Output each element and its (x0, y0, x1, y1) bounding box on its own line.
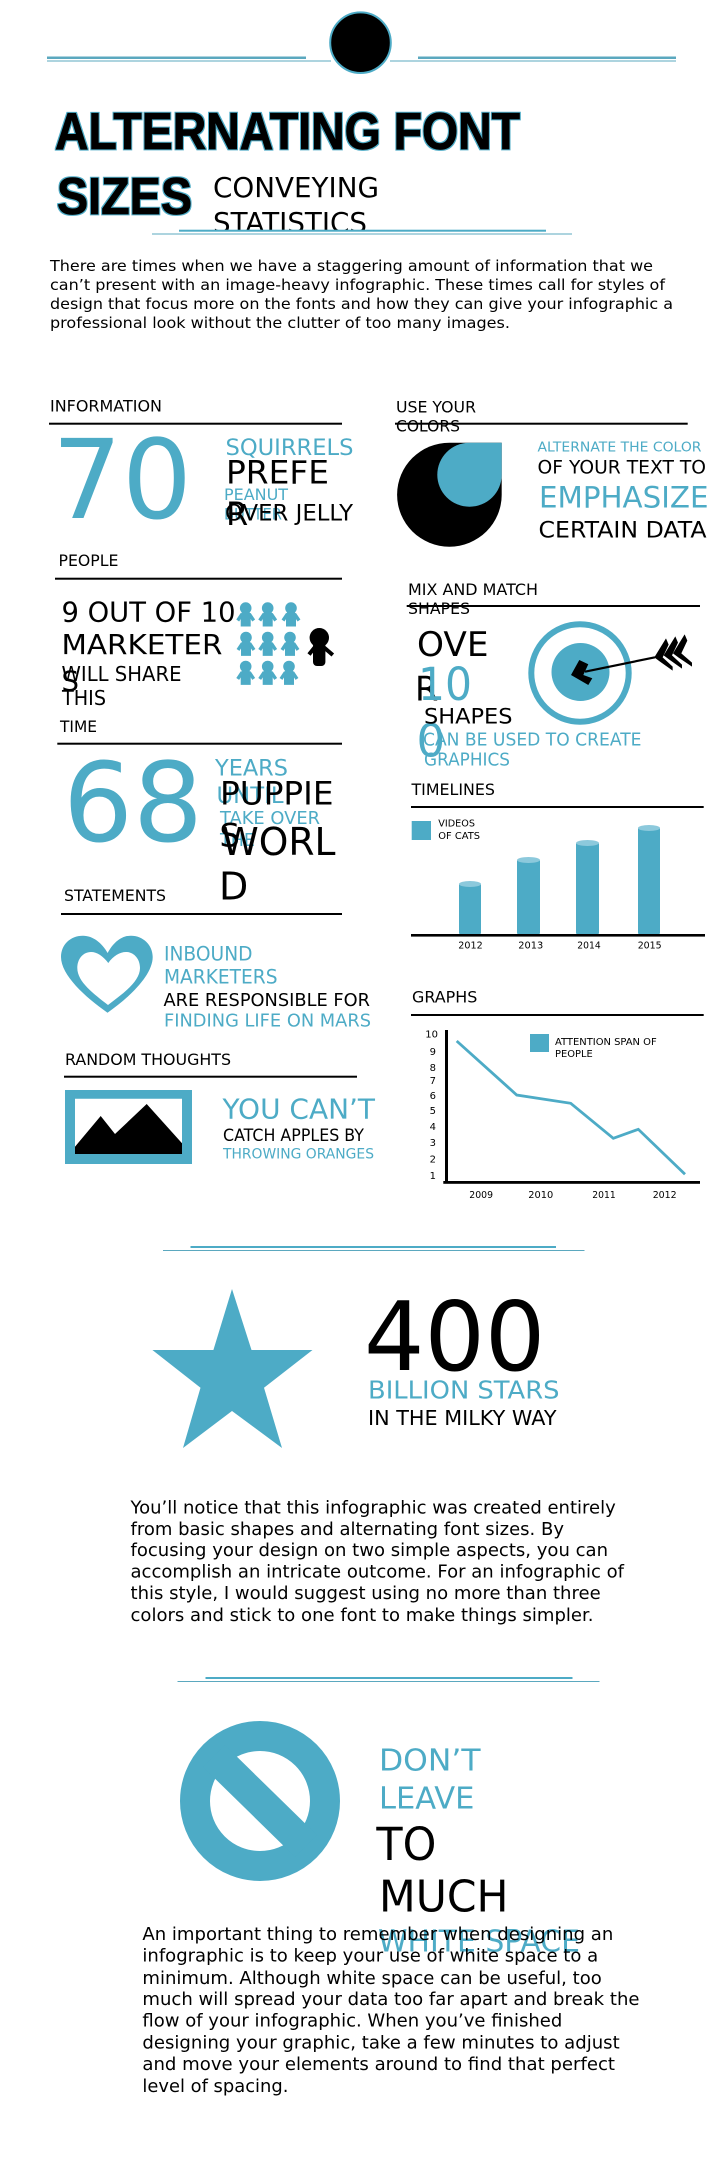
y axis labels: 7 (430, 1076, 436, 1087)
paragraph: white space: An important thing to remember when designing an (142, 1924, 613, 1945)
chart legend: ATTENTION SPAN OF (555, 1037, 657, 1048)
y axis labels: 9 (430, 1047, 436, 1058)
paragraph: white space (142, 1924, 640, 2097)
paragraph: basic shapes: accomplish an intricate outcome. For an infographic of (130, 1562, 625, 1583)
title (55, 103, 520, 226)
squirrels statement: OVER JELLY (225, 502, 354, 527)
y axis labels: 4 (430, 1122, 436, 1133)
statement text (164, 943, 371, 1032)
puppies statement: PUPPIE (220, 774, 334, 812)
heading: information: INFORMATION (50, 397, 162, 416)
paragraph: white space: flow of your infographic. When you’ve finished (142, 2011, 562, 2032)
intro paragraph: There are times when we have a staggering amount of information that we (49, 257, 653, 275)
icon: nine teal people (238, 602, 299, 685)
y axis labels (425, 1030, 438, 1182)
y axis labels: 10 (425, 1030, 438, 1041)
subtitle: CONVEYING (213, 171, 379, 204)
divider (163, 1246, 584, 1251)
statement text (538, 440, 708, 543)
puppies statement: THE (219, 830, 255, 851)
bar chart: 2014 (577, 940, 601, 951)
chart legend (530, 1034, 657, 1060)
chart legend: OF CATS (438, 831, 480, 842)
paragraph: basic shapes: colors and stick to one font to make things simpler. (130, 1605, 594, 1626)
over 100 shapes statement: SHAPES (424, 704, 512, 729)
title: ALTERNATING FONT (55, 103, 520, 161)
statement text: MARKETERS (164, 965, 278, 988)
intro paragraph (49, 257, 673, 332)
bar chart: 2012 (458, 940, 483, 951)
paragraph: white space: minimum. Although white space can be useful, too (142, 1968, 602, 1989)
paragraph: basic shapes: You’ll notice that this infographic was created entirely (129, 1497, 616, 1518)
x axis labels: 2011 (592, 1190, 616, 1201)
puppies statement (214, 756, 336, 908)
paragraph: basic shapes: this style, I would suggest using no more than three (130, 1583, 601, 1604)
statement: white space (375, 1744, 580, 1960)
statement: white space: TO (375, 1818, 436, 1871)
icon: heart (61, 936, 153, 1013)
statement text: EMPHASIZE (539, 481, 708, 515)
marketers statement: MARKETER (62, 629, 222, 661)
x axis labels: 2009 (469, 1190, 493, 1201)
puppies statement: S (220, 817, 240, 855)
intro paragraph: professional look without the clutter of too many images. (50, 314, 510, 332)
stat: 400 billion stars: 400 (364, 1283, 545, 1393)
squirrels statement: BUTTER (224, 504, 282, 523)
paragraph: basic shapes: from basic shapes and alternating font sizes. By (130, 1519, 564, 1540)
over 100 shapes statement (415, 625, 642, 771)
over 100 shapes statement: CAN BE USED TO CREATE (423, 730, 642, 750)
puppies statement: WORL (222, 820, 336, 864)
statement text: INBOUND (164, 943, 252, 966)
panel: information (49, 397, 354, 544)
stat: 400 billion stars: BILLION STARS (368, 1375, 560, 1404)
big number 70: 70 (52, 416, 192, 544)
marketers statement: S (62, 666, 79, 698)
divider (178, 1677, 600, 1682)
paragraph: basic shapes (129, 1497, 625, 1626)
statement text (221, 1093, 375, 1162)
marketers statement: WILL SHARE (62, 662, 182, 686)
over 100 shapes statement: R (415, 670, 438, 709)
y axis labels: 2 (430, 1155, 436, 1166)
panel: graphs (411, 988, 704, 1201)
line chart (425, 1030, 700, 1201)
squirrels statement: SQUIRRELS (226, 435, 354, 461)
y axis labels: 1 (430, 1171, 436, 1182)
over 100 shapes statement: GRAPHICS (424, 751, 510, 771)
statement: white space: WHITE SPACE (378, 1925, 580, 1960)
x axis labels: 2010 (528, 1190, 553, 1201)
title divider (152, 230, 572, 234)
chart legend: VIDEOS (438, 819, 475, 830)
bar chart: 2013 (518, 940, 543, 951)
big number 68: 68 (63, 739, 203, 867)
heading: statements: STATEMENTS (64, 886, 166, 905)
heading: people: PEOPLE (58, 551, 118, 570)
icon: target with arrow (531, 624, 692, 722)
stat: 400 billion stars (364, 1283, 560, 1430)
heading: random thoughts: RANDOM THOUGHTS (65, 1050, 231, 1069)
icon: black person (309, 628, 333, 666)
puppies statement: UNTIL (216, 783, 284, 809)
statement text: ALTERNATE THE COLOR (538, 440, 702, 456)
puppies statement: YEARS (214, 756, 288, 782)
subtitle (214, 176, 377, 230)
over 100 shapes statement: 0 (416, 715, 445, 768)
icon: nested teardrops (397, 443, 502, 547)
panel: timelines (411, 780, 705, 951)
panel: use your colors: COLORS (396, 417, 460, 436)
statement text: FINDING LIFE ON MARS (164, 1012, 371, 1032)
statement text: CATCH APPLES BY (223, 1126, 365, 1145)
subtitle: STATISTICS (213, 206, 367, 239)
squirrels statement: R (226, 495, 248, 533)
header ornament (47, 12, 676, 73)
bar chart (411, 819, 705, 951)
puppies statement: TAKE OVER (219, 808, 320, 829)
puppies statement: D (219, 864, 248, 908)
statement text: YOU CAN’T (221, 1093, 375, 1125)
panel: mix and match shapes: SHAPES (408, 599, 470, 618)
icon: prohibition sign (195, 1736, 325, 1866)
panel: people (55, 551, 342, 710)
over 100 shapes statement: OVE (417, 625, 488, 664)
icon: picture frame (65, 1090, 192, 1164)
squirrels statement: PREFE (226, 453, 329, 491)
statement text: THROWING ORANGES (222, 1146, 374, 1162)
statement text: OF YOUR TEXT TO (538, 457, 706, 478)
chart legend (412, 819, 480, 842)
paragraph: white space: much will spread your data too far apart and break the (142, 1989, 640, 2010)
panel: use your colors (395, 398, 708, 547)
icon: star (152, 1289, 312, 1448)
statement: white space: DON’T (379, 1744, 481, 1779)
heading: use your colors: USE YOUR (396, 398, 476, 417)
heading: time: TIME (59, 717, 97, 736)
intro paragraph: can’t present with an image-heavy infographic. These times call for styles of (50, 276, 666, 294)
paragraph: white space: designing your graphic, take a few minutes to adjust (142, 2032, 620, 2053)
paragraph: white space: and move your elements around to find that perfect (142, 2054, 615, 2075)
bar chart: 2015 (638, 940, 662, 951)
squirrels statement (224, 435, 354, 533)
heading: graphs: GRAPHS (412, 988, 477, 1007)
y axis labels: 8 (430, 1063, 436, 1074)
stat: 400 billion stars: IN THE MILKY WAY (368, 1406, 557, 1430)
panel: random thoughts (64, 1050, 375, 1164)
x axis labels: 2012 (653, 1190, 677, 1201)
statement: white space: MUCH (379, 1872, 508, 1923)
x axis labels (469, 1190, 677, 1201)
statement: white space: LEAVE (379, 1781, 474, 1816)
marketers statement: 9 OUT OF 10 (62, 597, 236, 629)
marketers statement: THIS (61, 686, 106, 710)
statement text: CERTAIN DATA (538, 518, 706, 543)
panel: mix and match shapes (407, 580, 700, 771)
y axis labels: 3 (430, 1138, 436, 1149)
paragraph: basic shapes: focusing your design on two simple aspects, you can (130, 1540, 608, 1561)
panel: time (57, 717, 342, 908)
panel: statements (61, 886, 371, 1032)
y axis labels: 5 (430, 1106, 436, 1117)
paragraph: white space: infographic is to keep your use of white space to a (142, 1946, 598, 1967)
paragraph: white space: level of spacing. (142, 2076, 288, 2097)
squirrels statement: PEANUT (224, 485, 288, 504)
statement text: ARE RESPONSIBLE FOR (164, 991, 370, 1011)
y axis labels: 6 (430, 1091, 436, 1102)
chart legend: PEOPLE (555, 1049, 593, 1060)
heading: mix and match shapes: MIX AND MATCH (408, 580, 538, 599)
title: SIZES (57, 168, 192, 226)
over 100 shapes statement: 10 (418, 658, 472, 711)
intro paragraph: design that focus more on the fonts and how they can give your infographic a (50, 295, 673, 313)
marketers statement (61, 597, 236, 710)
heading: timelines: TIMELINES (411, 780, 495, 799)
